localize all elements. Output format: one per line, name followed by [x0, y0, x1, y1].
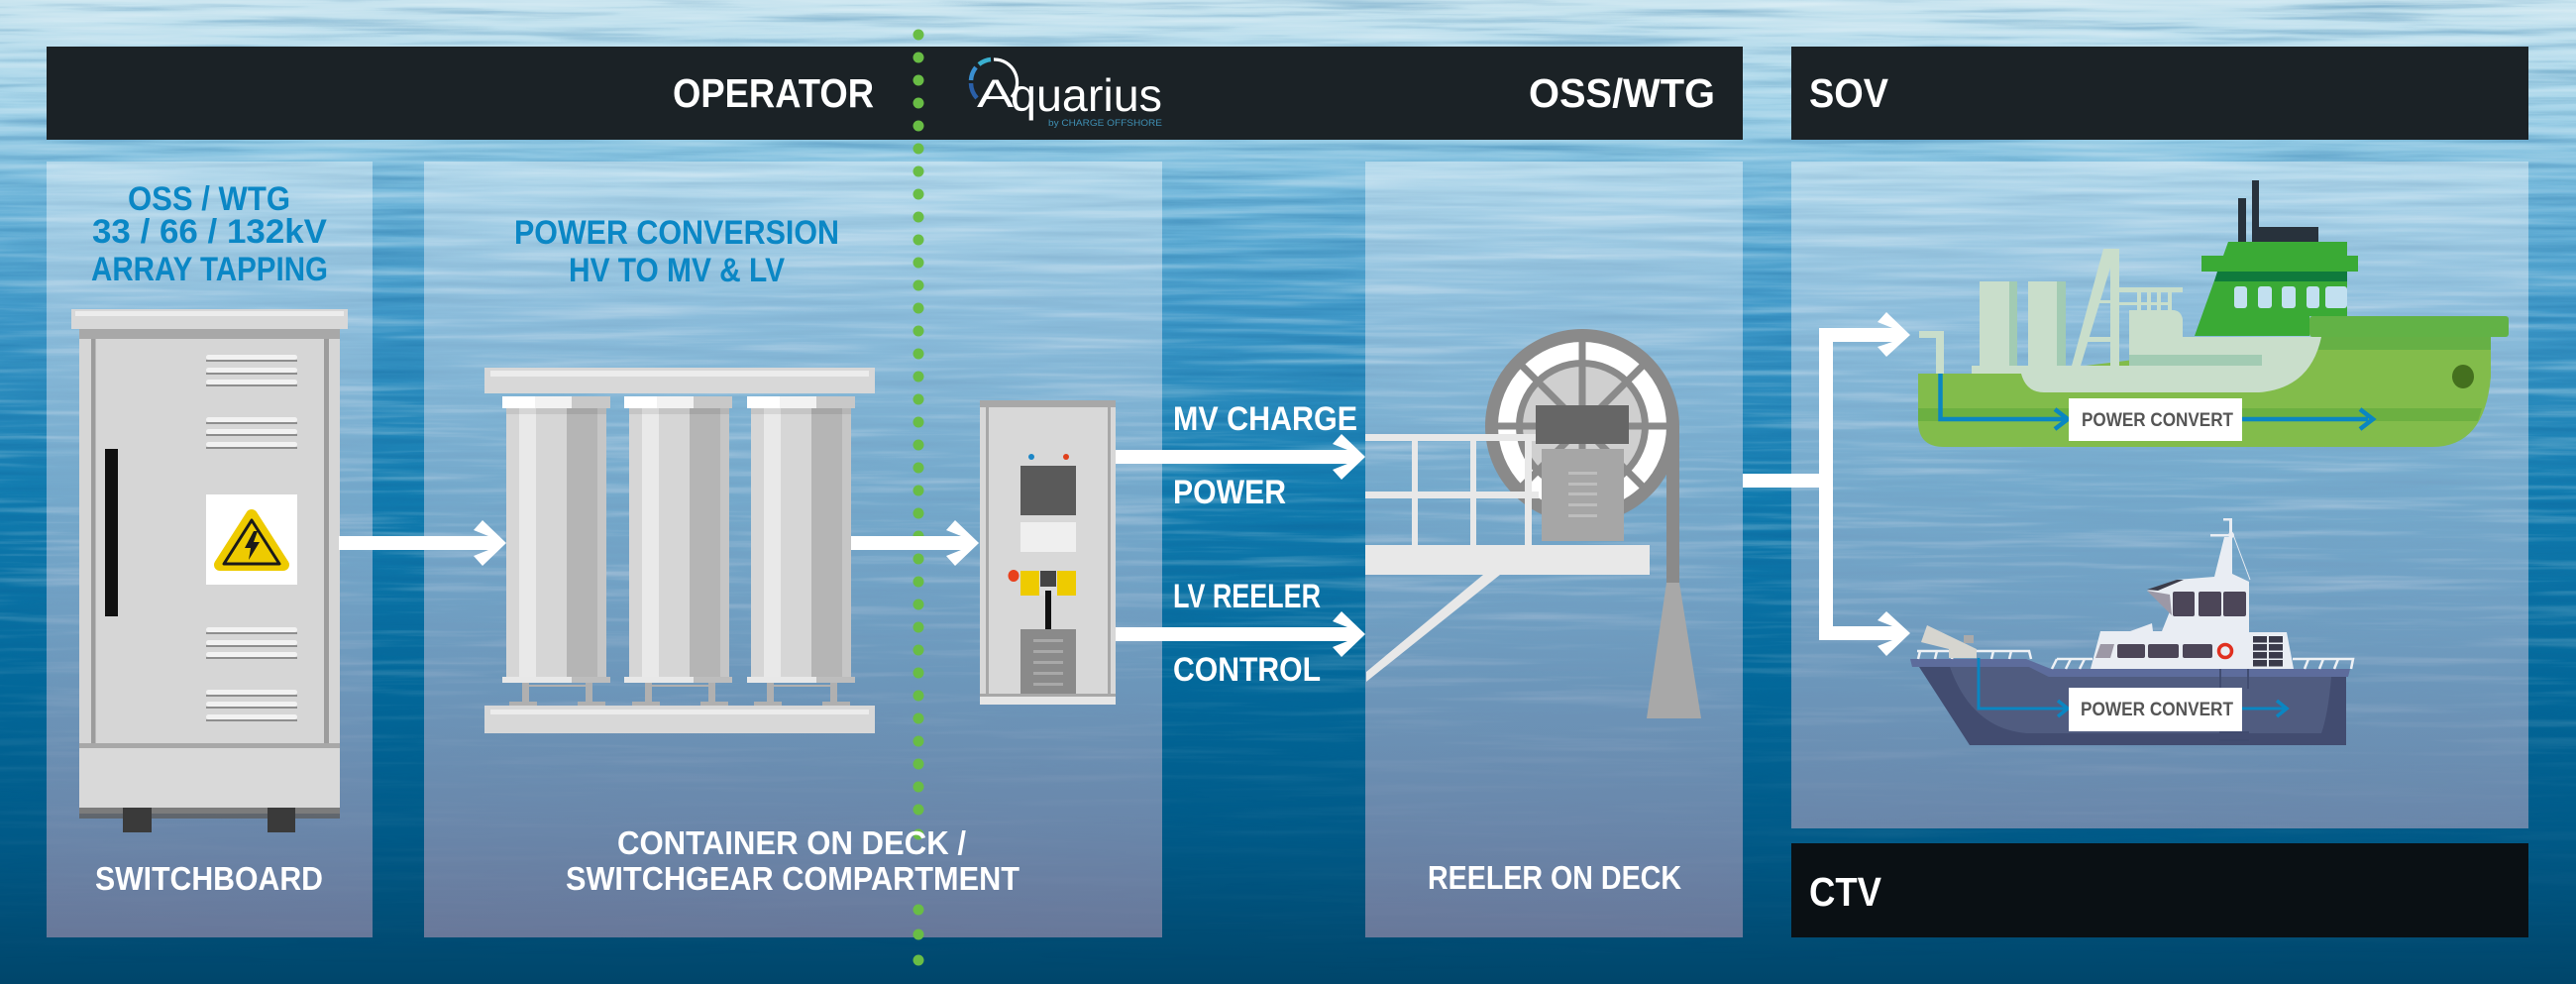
label: container on deck / switchgear compartment	[566, 824, 1020, 897]
text: power conversion	[514, 214, 839, 289]
panel: container on deck	[424, 162, 1162, 937]
funnels	[2238, 180, 2318, 243]
arrow: branch to SOV and CTV	[1743, 312, 1910, 656]
heading: OSS/WTG: OSS/WTG	[1529, 70, 1715, 116]
text: power conversion: HV TO MV & LV	[569, 252, 785, 289]
icon: CTV vessel	[1910, 518, 2353, 745]
text: OSS / WTG voltage tapping: OSS / WTG	[128, 180, 290, 218]
text: OSS / WTG voltage tapping	[91, 180, 328, 288]
transformer column 2	[624, 396, 732, 706]
CTV header bar	[1791, 843, 2528, 937]
railing and deck	[1365, 434, 1650, 682]
icon: cable reeler	[1365, 329, 1701, 718]
logo: Aquarius by Charge Offshore: quarius	[1011, 69, 1162, 121]
power convert box: POWER CONVERT	[2082, 410, 2233, 431]
logo: Aquarius by Charge Offshore: by CHARGE OFFSHORE	[1048, 118, 1162, 129]
operator and OSS/WTG header bar	[47, 47, 1743, 140]
label: reeler on deck: REELER ON DECK	[1428, 859, 1681, 896]
arrow: MV charge power	[1116, 434, 1365, 480]
heading: CTV: CTV	[1809, 869, 1882, 915]
label: switchboard: SWITCHBOARD	[95, 860, 323, 897]
label: MV charge: MV CHARGE	[1173, 400, 1357, 438]
power convert box: POWER CONVERT	[2081, 700, 2233, 720]
logo: Aquarius by Charge Offshore: A	[977, 72, 1014, 116]
arrow: LV reeler control	[1116, 611, 1365, 657]
arrow: transformer to switchgear	[851, 520, 979, 566]
vent slots	[206, 355, 297, 721]
text: OSS / WTG voltage tapping: 33 / 66 / 132kV	[92, 213, 327, 251]
icon: transformer bank	[484, 368, 875, 733]
text: OSS / WTG voltage tapping: ARRAY TAPPING	[91, 251, 328, 288]
power flow arrows	[1979, 658, 2285, 709]
panel: switchboard	[47, 162, 373, 937]
hull	[1918, 337, 2491, 447]
railings	[1917, 651, 2353, 669]
power convert box	[2069, 398, 2242, 441]
text: power conversion: POWER CONVERSION	[514, 214, 839, 252]
icon: switchboard cabinet	[71, 309, 348, 832]
panel: vessels	[1791, 162, 2528, 828]
icon: SOV vessel	[1918, 180, 2509, 447]
label: power: POWER	[1173, 474, 1286, 511]
arrow: switchboard to transformer	[339, 520, 506, 566]
heading: OPERATOR: OPERATOR	[673, 70, 874, 116]
SOV header bar	[1791, 47, 2528, 140]
label: container on deck / switchgear compartment: SWITCHGEAR COMPARTMENT	[566, 860, 1020, 897]
icon: high voltage warning sign	[206, 494, 297, 585]
superstructure	[2091, 537, 2294, 669]
bridge	[2195, 242, 2358, 336]
label: LV reeler: LV REELER	[1173, 578, 1321, 615]
deck equipment	[1919, 249, 2321, 392]
power convert box	[2069, 688, 2242, 731]
heading: SOV: SOV	[1809, 70, 1889, 116]
label: container on deck / switchgear compartment: CONTAINER ON DECK /	[617, 824, 966, 861]
hull	[1919, 667, 2346, 745]
transformer column 1	[502, 396, 610, 706]
transformer column 3	[747, 396, 855, 706]
label: control: CONTROL	[1173, 651, 1321, 689]
icon: switchgear cabinet	[980, 400, 1116, 705]
power flow arrows	[1940, 374, 2368, 419]
panel: reeler on deck	[1365, 162, 1743, 937]
logo: Aquarius by Charge Offshore	[971, 59, 1162, 129]
green dotted boundary line	[913, 30, 923, 965]
launch ramp	[1921, 625, 1977, 658]
